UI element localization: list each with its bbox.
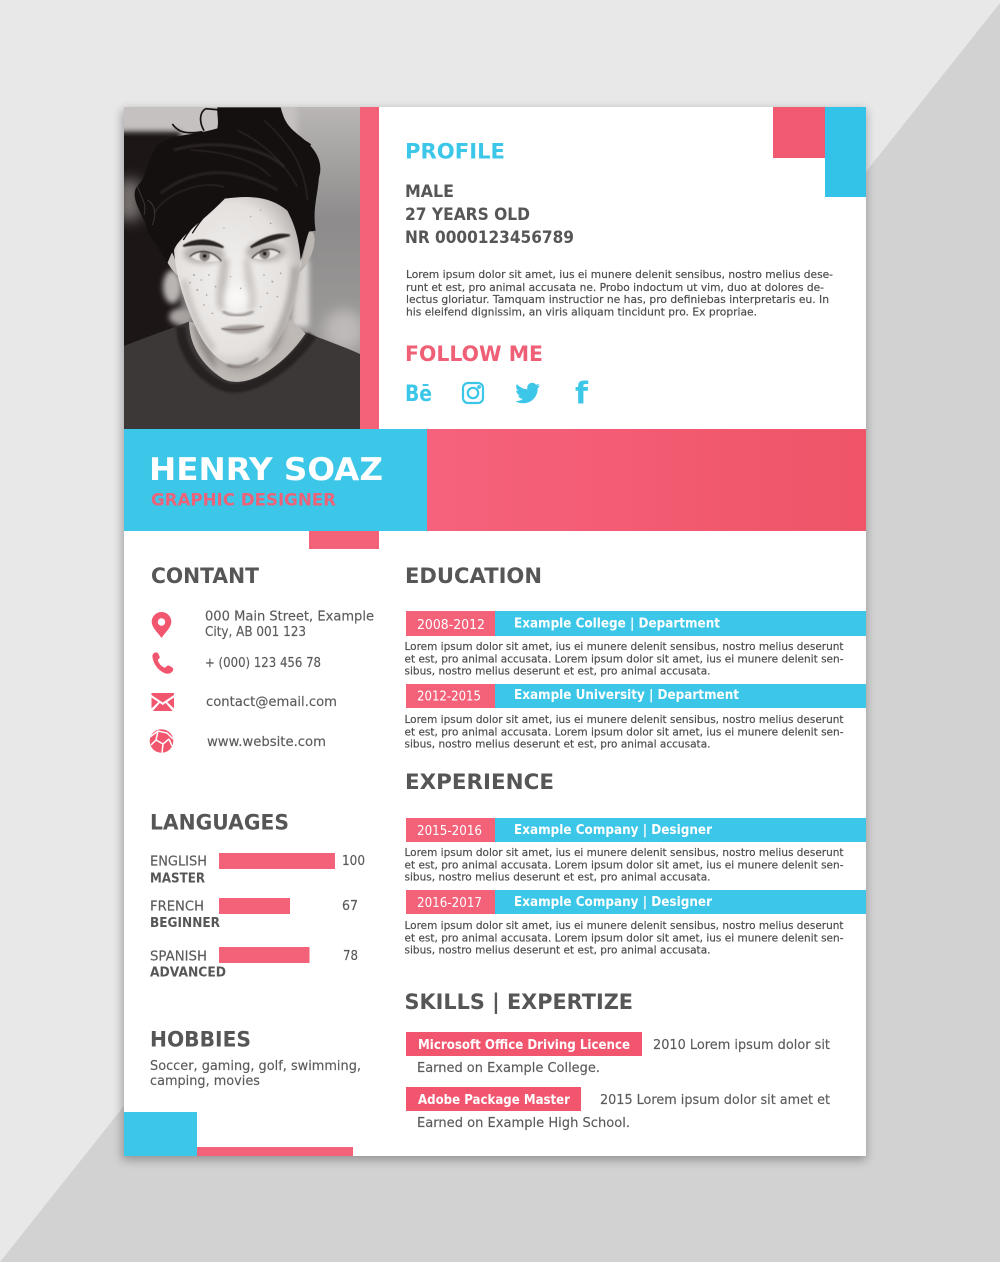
profile paragraph: lectus gloriatur. Tamquam instructior ne has, pro definiebas interpretaris eu. In bbox=[406, 294, 829, 306]
icon: phone bbox=[152, 652, 173, 674]
profile paragraph bbox=[406, 269, 833, 318]
experience entry 2 bbox=[404, 890, 866, 956]
education entry 2: 2012-2015 bbox=[417, 688, 481, 704]
neck bbox=[189, 318, 306, 382]
panel: profile bbox=[405, 140, 833, 318]
skill 1 bbox=[406, 1032, 830, 1076]
hobbies heading: HOBBIES bbox=[150, 1028, 251, 1052]
education heading: EDUCATION bbox=[405, 564, 542, 588]
hobbies list: Soccer, gaming, golf, swimming, bbox=[150, 1059, 361, 1074]
icon: globe bbox=[150, 729, 173, 753]
facial shading bbox=[183, 242, 296, 350]
personal details bbox=[405, 182, 574, 247]
education entry 2: sibus, nostro melius deserunt et est, pro animal accusata. bbox=[404, 738, 710, 750]
hair bbox=[135, 107, 320, 263]
experience entry 2: Example Company | Designer bbox=[514, 895, 713, 910]
website: www.website.com bbox=[207, 735, 326, 750]
experience entry 1: Lorem ipsum dolor sit amet, ius ei munere delenit sensibus, nostro melius deserunt bbox=[404, 847, 844, 859]
languages heading: LANGUAGES bbox=[150, 810, 289, 834]
language: english: 100 bbox=[342, 854, 365, 869]
panel: experience bbox=[404, 770, 866, 956]
profile paragraph: runt et est, pro animal accusata ne. Probo indoctum ut vim, duo at dolores de- bbox=[406, 282, 824, 294]
profile paragraph: his eleifend dignissim, an viris aliquam tincidunt pro. Ex propriae. bbox=[406, 306, 757, 318]
profile paragraph: Lorem ipsum dolor sit amet, ius ei munere delenit sensibus, nostro melius dese- bbox=[406, 269, 833, 281]
personal details: 27 YEARS OLD bbox=[405, 205, 530, 224]
phone number: + (000) 123 456 78 bbox=[205, 656, 321, 671]
language: spanish: 78 bbox=[343, 949, 358, 964]
language: english bbox=[150, 853, 365, 886]
skill 1: Earned on Example College. bbox=[417, 1061, 600, 1076]
skill 2 bbox=[406, 1087, 830, 1131]
experience entry 2: Lorem ipsum dolor sit amet, ius ei munere delenit sensibus, nostro melius deserunt bbox=[404, 920, 844, 932]
shirt bbox=[124, 322, 360, 429]
language: french: BEGINNER bbox=[150, 916, 220, 931]
panel: hobbies bbox=[150, 1028, 361, 1089]
education entry 1: 2008-2012 bbox=[417, 617, 485, 633]
education entry 2: Example University | Department bbox=[514, 688, 739, 703]
bottom pink bar bbox=[197, 1147, 353, 1156]
top right blue block bbox=[825, 107, 866, 197]
skill 2: Earned on Example High School. bbox=[417, 1116, 630, 1131]
address: 000 Main Street, Example bbox=[205, 610, 374, 624]
panel: skills bbox=[404, 990, 830, 1131]
education entry 1: sibus, nostro melius deserunt et est, pro animal accusata. bbox=[404, 666, 710, 678]
language: english: ENGLISH bbox=[150, 854, 207, 870]
education entry 2: Lorem ipsum dolor sit amet, ius ei munere delenit sensibus, nostro melius deserunt bbox=[404, 714, 844, 726]
address: City, AB 001 123 bbox=[205, 625, 306, 640]
icon: envelope bbox=[152, 693, 174, 711]
experience entry 2: 2016-2017 bbox=[417, 895, 482, 911]
pink vertical strip bbox=[360, 107, 379, 429]
icon: instagram bbox=[463, 383, 483, 403]
address bbox=[205, 610, 374, 640]
education entry 1: Example College | Department bbox=[514, 616, 720, 632]
experience entry 2: et est, pro animal accusata. Lorem ipsum dolor sit amet, ius ei munere delenit sen- bbox=[404, 932, 844, 944]
language: spanish: ADVANCED bbox=[150, 966, 226, 980]
email: contact@email.com bbox=[206, 695, 337, 710]
icon: facebook: f bbox=[575, 376, 589, 412]
top right pink square bbox=[773, 107, 825, 158]
experience entry 1: 2015-2016 bbox=[417, 823, 482, 839]
experience entry 1: sibus, nostro melius deserunt et est, pro animal accusata. bbox=[404, 872, 710, 884]
icon: map pin bbox=[152, 612, 171, 638]
hobbies list bbox=[150, 1059, 361, 1089]
personal details: MALE bbox=[405, 182, 454, 201]
skills heading: SKILLS | EXPERTIZE bbox=[404, 990, 633, 1015]
experience entry 1: Example Company | Designer bbox=[514, 823, 713, 838]
resume page bbox=[111, 100, 866, 1160]
contact heading: CONTANT bbox=[151, 564, 260, 588]
icon: behance: Bē bbox=[405, 382, 432, 407]
panel: contact bbox=[150, 564, 374, 753]
icon: twitter bbox=[515, 383, 540, 403]
skill 2: 2015 Lorem ipsum dolor sit amet et bbox=[600, 1093, 830, 1108]
language: french: 67 bbox=[342, 899, 358, 914]
lips bbox=[221, 325, 264, 334]
follow me heading: FOLLOW ME bbox=[405, 342, 543, 366]
experience heading: EXPERIENCE bbox=[405, 770, 554, 794]
hobbies list: camping, movies bbox=[150, 1074, 260, 1089]
skill 1: 2010 Lorem ipsum dolor sit bbox=[653, 1038, 830, 1053]
skill 2: Adobe Package Master bbox=[418, 1093, 571, 1108]
education entry 1: Lorem ipsum dolor sit amet, ius ei munere delenit sensibus, nostro melius deserunt bbox=[404, 641, 844, 653]
language: spanish: SPANISH bbox=[150, 950, 207, 964]
panel: languages bbox=[150, 810, 365, 980]
eyes and brows bbox=[183, 235, 290, 262]
job title: GRAPHIC DESIGNER bbox=[151, 490, 336, 510]
freckles bbox=[189, 209, 281, 314]
language: spanish bbox=[150, 947, 358, 980]
bottom left blue block bbox=[124, 1112, 197, 1156]
panel: follow me bbox=[405, 342, 589, 412]
education entry 1 bbox=[404, 611, 866, 678]
education entry 2 bbox=[404, 684, 866, 750]
language: french bbox=[150, 898, 358, 931]
pink tab under band bbox=[309, 531, 379, 549]
experience entry 2: sibus, nostro melius deserunt et est, pro animal accusata. bbox=[404, 944, 710, 956]
language: english: MASTER bbox=[150, 872, 205, 886]
personal details: NR 0000123456789 bbox=[405, 228, 574, 247]
education entry 1: et est, pro animal accusata. Lorem ipsum dolor sit amet, ius ei munere delenit sen- bbox=[404, 654, 844, 666]
name: HENRY SOAZ bbox=[149, 452, 383, 488]
panel: education bbox=[404, 564, 866, 750]
experience entry 1: et est, pro animal accusata. Lorem ipsum dolor sit amet, ius ei munere delenit sen- bbox=[404, 860, 844, 872]
experience entry 1 bbox=[404, 818, 866, 884]
profile heading: PROFILE bbox=[405, 140, 505, 164]
face bbox=[174, 196, 300, 367]
name band pink bbox=[427, 429, 866, 531]
language: french: FRENCH bbox=[150, 900, 204, 914]
name band blue bbox=[124, 429, 427, 531]
ears bbox=[168, 252, 178, 276]
skill 1: Microsoft Office Driving Licence bbox=[418, 1038, 630, 1053]
education entry 2: et est, pro animal accusata. Lorem ipsum dolor sit amet, ius ei munere delenit sen- bbox=[404, 726, 844, 738]
portrait photo bbox=[111, 100, 364, 429]
